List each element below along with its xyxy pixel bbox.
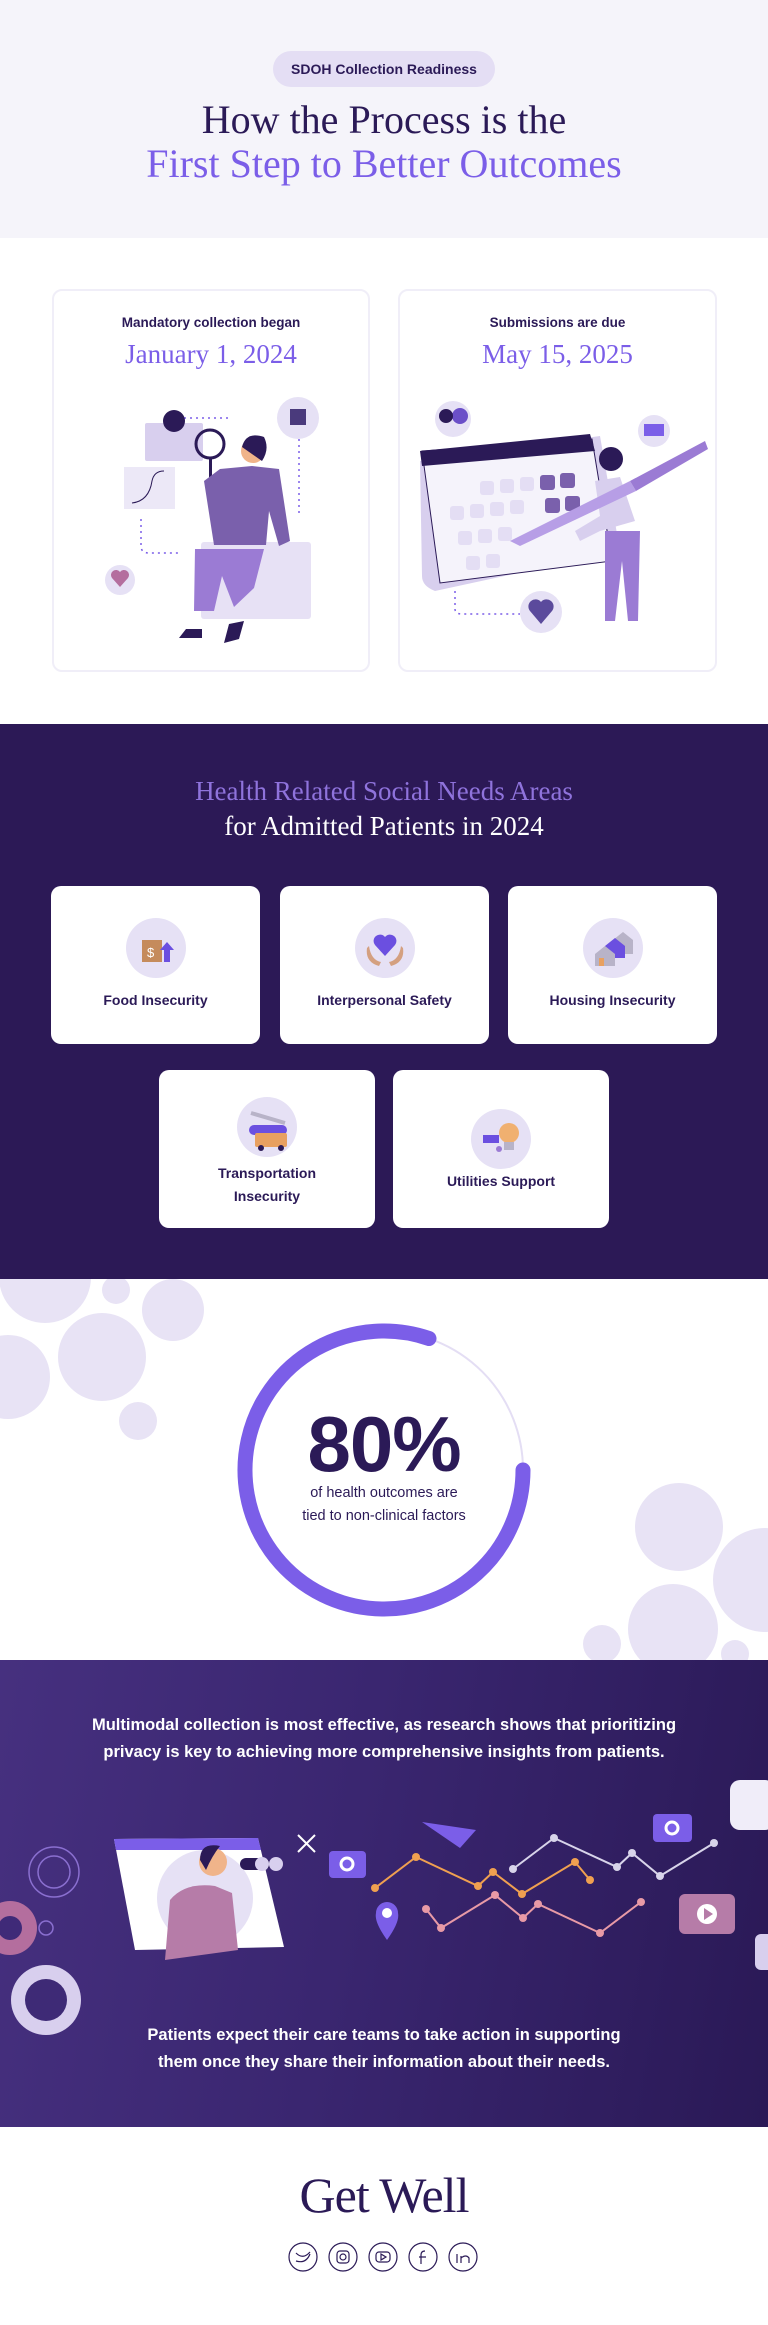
- card: utilities support: Utilities Support: [447, 1173, 555, 1189]
- logo: Get Well: [300, 2167, 468, 2223]
- icon: houses: [582, 918, 642, 978]
- card: housing insecurity: [508, 886, 717, 1044]
- text block top: [92, 1716, 676, 1761]
- card: transportation insecurity: Transportation: [218, 1165, 316, 1181]
- stat caption: [302, 1485, 466, 1524]
- icon: bus and train: [237, 1097, 297, 1157]
- title: [146, 97, 622, 186]
- social icons: [288, 2242, 478, 2272]
- text block bottom: them once they share their information about their needs.: [158, 2053, 610, 2071]
- header band: [0, 0, 768, 238]
- panel: social needs: [0, 724, 768, 1279]
- illustration: calendar: [420, 401, 708, 633]
- illustration: analytics scene: [0, 1780, 768, 2035]
- chart: 80% ring: [238, 1324, 530, 1616]
- panel: mandatory collection: [52, 289, 370, 672]
- label: Submissions are due: [490, 315, 625, 330]
- text block bottom: [147, 2026, 621, 2071]
- date: May 15, 2025: [482, 339, 633, 369]
- label: Mandatory collection began: [122, 315, 300, 330]
- stat: 80%: [307, 1400, 461, 1488]
- heading: [195, 776, 573, 841]
- decorative bubbles: [0, 1279, 768, 1660]
- text block bottom: Patients expect their care teams to take action in supporting: [147, 2026, 621, 2044]
- heading: for Admitted Patients in 2024: [224, 811, 544, 841]
- date: January 1, 2024: [125, 339, 297, 369]
- icon: grocery bag: $: [146, 945, 154, 960]
- icon: tap and bulb: [471, 1109, 531, 1169]
- panel: multimodal collection: [0, 1660, 768, 2127]
- card: housing insecurity: Housing Insecurity: [549, 992, 676, 1008]
- icon: grocery bag: [126, 918, 186, 978]
- pill tag: SDOH Collection Readiness: [291, 61, 477, 77]
- panel: submissions due: [398, 289, 717, 672]
- card: transportation insecurity: [159, 1070, 375, 1228]
- card: food insecurity: Food Insecurity: [103, 992, 208, 1008]
- text block top: privacy is key to achieving more comprehensive insights from patients.: [103, 1743, 665, 1761]
- title: First Step to Better Outcomes: [146, 141, 622, 186]
- pill tag: [273, 51, 495, 87]
- text block top: Multimodal collection is most effective, as research shows that prioritizing: [92, 1716, 676, 1734]
- card: transportation insecurity: Insecurity: [234, 1188, 300, 1204]
- icon: hands heart: [354, 918, 414, 978]
- card: utilities support: [393, 1070, 609, 1228]
- card: interpersonal safety: Interpersonal Safety: [317, 992, 452, 1008]
- stat caption: of health outcomes are: [310, 1485, 458, 1501]
- card: food insecurity: [51, 886, 260, 1044]
- stat caption: tied to non-clinical factors: [302, 1508, 466, 1524]
- heading: Health Related Social Needs Areas: [195, 776, 573, 806]
- card: interpersonal safety: [280, 886, 489, 1044]
- illustration: person with magnifier: [105, 397, 319, 643]
- title: How the Process is the: [202, 97, 566, 142]
